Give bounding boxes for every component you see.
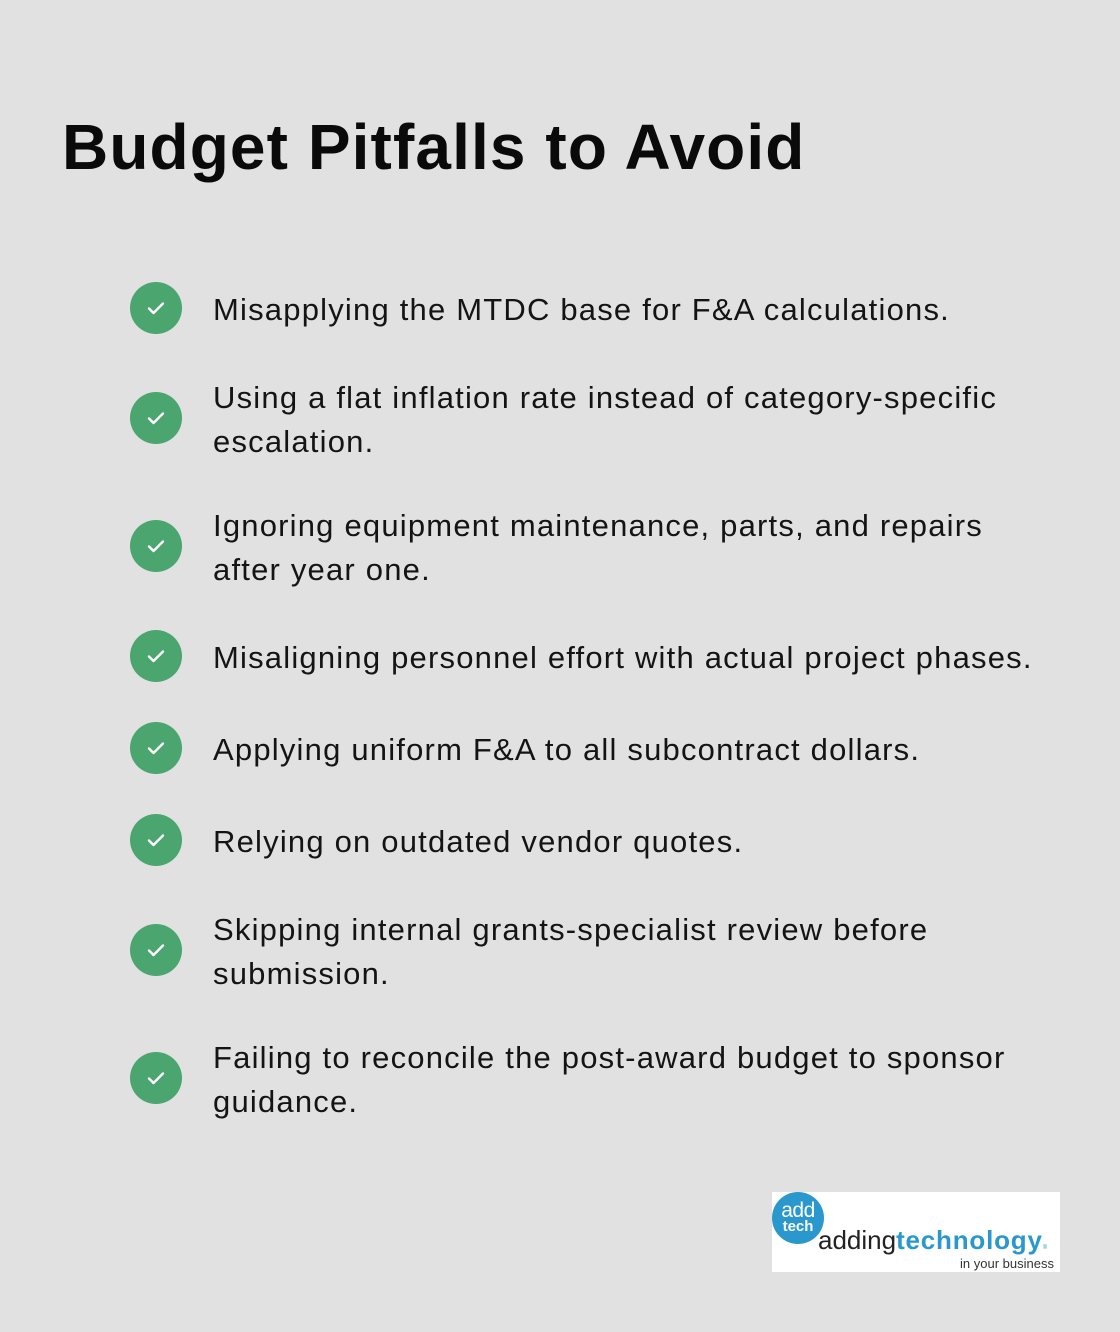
item 4: Misaligning personnel effort with actual project phases. bbox=[213, 640, 1033, 675]
item 7: Skipping internal grants-specialist review before bbox=[213, 912, 928, 947]
logo tagline: in your business bbox=[960, 1256, 1054, 1271]
logo badge bbox=[772, 1192, 824, 1244]
item 2 bbox=[130, 380, 997, 459]
item 3: after year one. bbox=[213, 552, 431, 587]
item 3 bbox=[130, 508, 983, 587]
item 8: guidance. bbox=[213, 1084, 358, 1119]
item 8: Failing to reconcile the post-award budget to sponsor bbox=[213, 1040, 1006, 1075]
item 7 bbox=[130, 912, 928, 991]
title: Budget Pitfalls to Avoid bbox=[62, 111, 805, 183]
item 6 bbox=[130, 814, 743, 866]
item 1: Misapplying the MTDC base for F&A calculations. bbox=[213, 292, 950, 327]
item 8 bbox=[130, 1040, 1006, 1119]
logo wordmark: addingtechnology® bbox=[818, 1225, 1047, 1255]
item 7: submission. bbox=[213, 956, 390, 991]
logo badge: add bbox=[781, 1199, 815, 1222]
logo bbox=[772, 1192, 1060, 1272]
item 5 bbox=[130, 722, 920, 774]
item 3: Ignoring equipment maintenance, parts, and repairs bbox=[213, 508, 983, 543]
item 2: escalation. bbox=[213, 424, 374, 459]
logo badge: tech bbox=[783, 1218, 813, 1235]
item 5: Applying uniform F&A to all subcontract dollars. bbox=[213, 732, 920, 767]
item 2: Using a flat inflation rate instead of category-specific bbox=[213, 380, 997, 415]
item 6: Relying on outdated vendor quotes. bbox=[213, 824, 743, 859]
item 1 bbox=[130, 282, 950, 334]
item 4 bbox=[130, 630, 1033, 682]
